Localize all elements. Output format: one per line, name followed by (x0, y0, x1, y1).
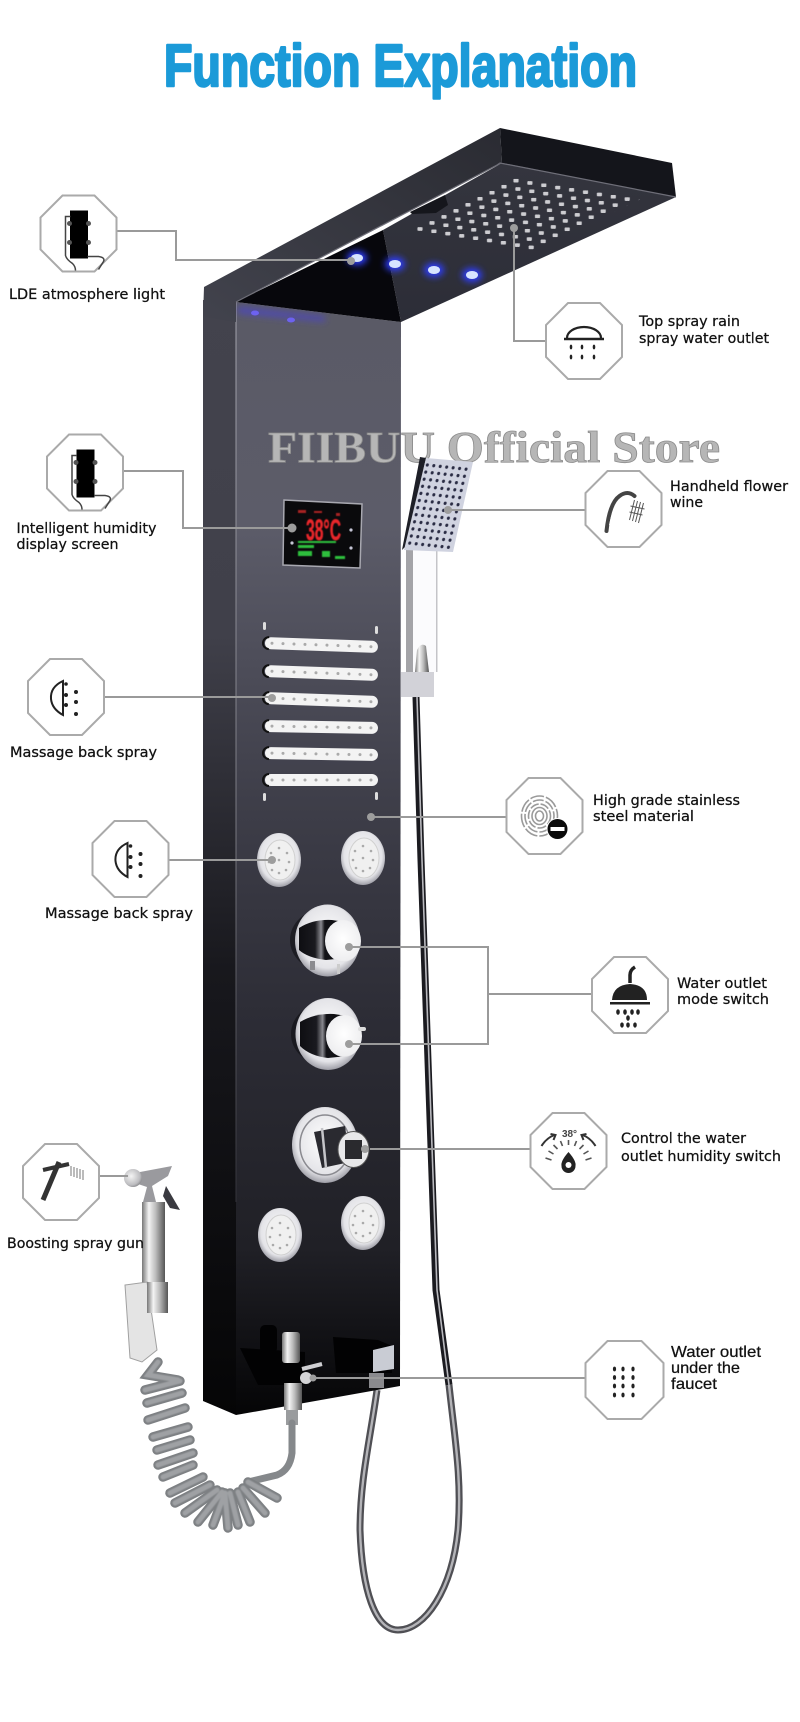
icon: spray gun (23, 1144, 99, 1220)
leader (99, 1175, 128, 1177)
label: wine (670, 495, 703, 511)
coil highlight (145, 1362, 277, 1528)
side buttons (290, 528, 353, 550)
rain outlet holes (407, 177, 641, 252)
icon: spray (28, 659, 104, 735)
dark junction wedge (410, 195, 448, 214)
lever (302, 1364, 322, 1369)
anchor (347, 257, 355, 265)
mounting pins (263, 622, 378, 801)
icon: fingerprint (506, 778, 582, 854)
thermostat knob (292, 1107, 369, 1183)
mode knob 2 (291, 998, 366, 1070)
shower panel (203, 128, 676, 1425)
spray gun with coil hose (124, 1166, 292, 1528)
leader (371, 816, 507, 818)
leader (370, 1148, 530, 1150)
label (621, 1131, 781, 1165)
valve ball (300, 1372, 312, 1384)
leader (116, 231, 351, 260)
label: display screen (16, 537, 118, 553)
anchors (345, 943, 353, 1048)
handle side strip (406, 548, 413, 672)
callout: handheld (444, 471, 788, 547)
label: outlet humidity switch (621, 1149, 781, 1165)
red status marks (298, 510, 340, 516)
coil shadow (145, 1362, 277, 1528)
icon: shower head (592, 957, 668, 1033)
icon: handheld shower (586, 471, 662, 547)
temperature reading: 38°C (306, 514, 341, 547)
green readouts (298, 541, 345, 559)
leader (104, 696, 272, 698)
chrome valve top (282, 1332, 300, 1363)
label: steel material (593, 809, 694, 825)
gray connector (286, 1410, 298, 1425)
label: spray water outlet (639, 331, 770, 347)
blue light band (238, 306, 325, 322)
gun trigger (163, 1186, 180, 1210)
back spray bars (263, 637, 378, 786)
leader (448, 509, 585, 511)
icon: rain head (546, 303, 622, 379)
label: mode switch (677, 992, 769, 1008)
faucet (240, 1325, 394, 1425)
callout: stainless steel (367, 778, 740, 854)
anchor (367, 813, 375, 821)
callout: massage back spray middle (45, 821, 276, 922)
panel front face (236, 302, 401, 1415)
label: faucet (671, 1376, 718, 1393)
flexible shower hose (360, 697, 459, 1630)
label: Handheld flower (670, 479, 788, 495)
mode knob 1 (290, 904, 361, 976)
handle right edge (436, 550, 438, 672)
panel edge highlight (236, 302, 237, 1202)
leader (122, 471, 292, 528)
chrome valve lower (284, 1383, 302, 1410)
watermark: FIIBUU Official Store (268, 423, 720, 472)
black reflective triangle (236, 230, 401, 322)
icon: wall unit (40, 196, 116, 272)
anchor (268, 694, 276, 702)
callout: top spray (510, 224, 770, 379)
callout: LED light (9, 196, 355, 303)
label: Water outlet (677, 976, 768, 992)
head edge highlight (236, 163, 676, 302)
icon: spray (92, 821, 168, 897)
callout: temperature switch (361, 1113, 781, 1189)
anchor (361, 1145, 369, 1153)
callout: spray gun (7, 1144, 144, 1252)
label: LDE atmosphere light (9, 287, 166, 303)
leader (168, 859, 272, 861)
clamp (401, 672, 434, 697)
callout: massage back spray top (10, 659, 276, 761)
wall bracket (125, 1282, 157, 1362)
head face (404, 458, 473, 552)
massage nozzles upper (257, 831, 385, 887)
head holes (406, 461, 470, 551)
wall plate (373, 1345, 394, 1372)
head rear rim (500, 128, 676, 197)
icon: temperature dial (530, 1113, 606, 1189)
cone (415, 645, 429, 672)
label (677, 976, 769, 1008)
hand shower (268, 423, 720, 697)
label (671, 1344, 762, 1393)
anchor (288, 524, 296, 532)
label (638, 314, 770, 347)
display screen (283, 500, 362, 568)
handle (413, 548, 437, 672)
blue light marks (251, 310, 295, 322)
label: Boosting spray gun (7, 1236, 144, 1252)
hose connector (369, 1373, 384, 1388)
anchor (310, 1374, 316, 1382)
gun body (138, 1166, 172, 1202)
label: Massage back spray (10, 745, 157, 761)
anchor (444, 506, 452, 514)
label: High grade stainless (593, 793, 740, 809)
icon: temperature dial: 38° (562, 1129, 577, 1140)
LED lights (347, 251, 482, 282)
anchor (510, 224, 518, 232)
right wall block (333, 1337, 392, 1373)
black valve block (240, 1348, 305, 1385)
top head surface (203, 128, 502, 322)
head back edge (402, 457, 426, 550)
shaft clamp (147, 1282, 168, 1313)
label: Massage back spray (45, 906, 193, 922)
anchor (268, 856, 276, 864)
icon: wall unit (47, 434, 123, 510)
label: under the (671, 1360, 740, 1377)
label: Intelligent humidity (16, 521, 156, 537)
leader (313, 1377, 585, 1379)
black valve cap (260, 1325, 277, 1353)
label: Water outlet (671, 1344, 762, 1361)
callout: humidity display (16, 434, 296, 553)
title: Function Explanation (164, 33, 637, 99)
connecting hose (248, 1423, 292, 1482)
panel side face (203, 300, 236, 1415)
callout: mode switch (345, 943, 769, 1048)
icon: outlet dots (586, 1341, 664, 1419)
callout: faucet outlet (310, 1341, 762, 1419)
shaft (142, 1202, 165, 1283)
leader (514, 228, 546, 341)
label (16, 521, 156, 553)
massage nozzles lower (258, 1196, 385, 1262)
label (593, 793, 740, 825)
label: Control the water (621, 1131, 746, 1147)
label (670, 479, 788, 511)
leader (349, 947, 592, 1044)
head underside (383, 163, 676, 322)
gun ball (124, 1169, 142, 1187)
label: Top spray rain (638, 314, 740, 330)
